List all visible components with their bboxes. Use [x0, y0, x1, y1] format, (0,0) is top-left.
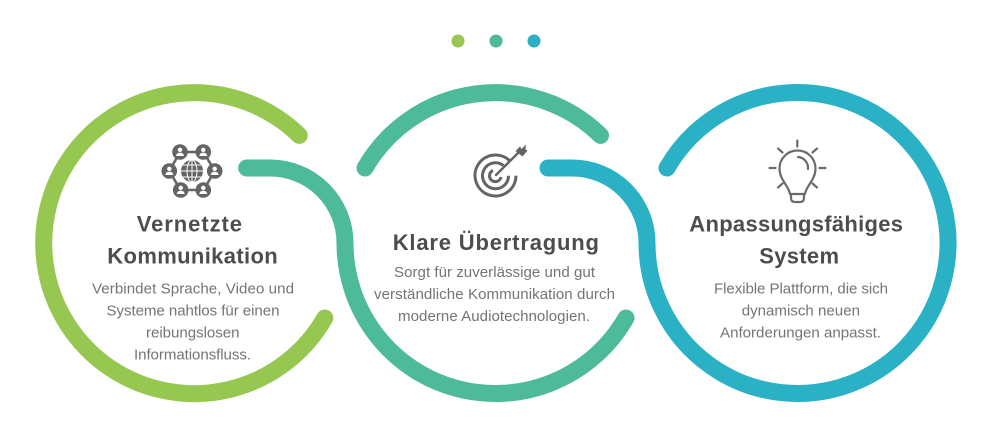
body text: moderne Audiotechnologien.	[398, 308, 590, 325]
icon: light bulb	[770, 140, 826, 202]
progress dots	[452, 34, 540, 48]
panel: Vernetzte Kommunikation	[44, 93, 325, 394]
heading: System	[759, 244, 839, 269]
body text: Flexible Plattform, die sich	[714, 280, 888, 298]
body text: Sorgt für zuverlässige und gut	[394, 264, 596, 281]
panel: Klare Übertragung	[247, 93, 626, 394]
body text: dynamisch neuen	[742, 302, 860, 320]
heading: Vernetzte	[137, 212, 242, 237]
teal ring	[247, 93, 626, 394]
heading: Kommunikation	[107, 244, 278, 269]
body text: Verbindet Sprache, Video und	[92, 280, 294, 298]
green ring	[44, 93, 325, 394]
blue ring	[548, 92, 948, 393]
heading	[107, 212, 278, 269]
heading	[689, 212, 903, 269]
body text	[714, 280, 888, 342]
icon: target with arrow	[475, 144, 528, 196]
icon: network globe	[162, 144, 222, 198]
panel: Anpassungsfähiges System	[548, 92, 948, 393]
heading: Anpassungsfähiges	[689, 212, 903, 237]
body text: Anforderungen anpasst.	[720, 324, 881, 342]
body text	[374, 264, 615, 325]
body text: verständliche Kommunikation durch	[374, 286, 615, 303]
body text: reibungslosen	[146, 324, 240, 342]
body text: Systeme nahtlos für einen	[106, 302, 280, 320]
body text	[92, 280, 294, 364]
heading: Klare Übertragung	[393, 230, 599, 255]
body text: Informationsfluss.	[134, 346, 251, 364]
